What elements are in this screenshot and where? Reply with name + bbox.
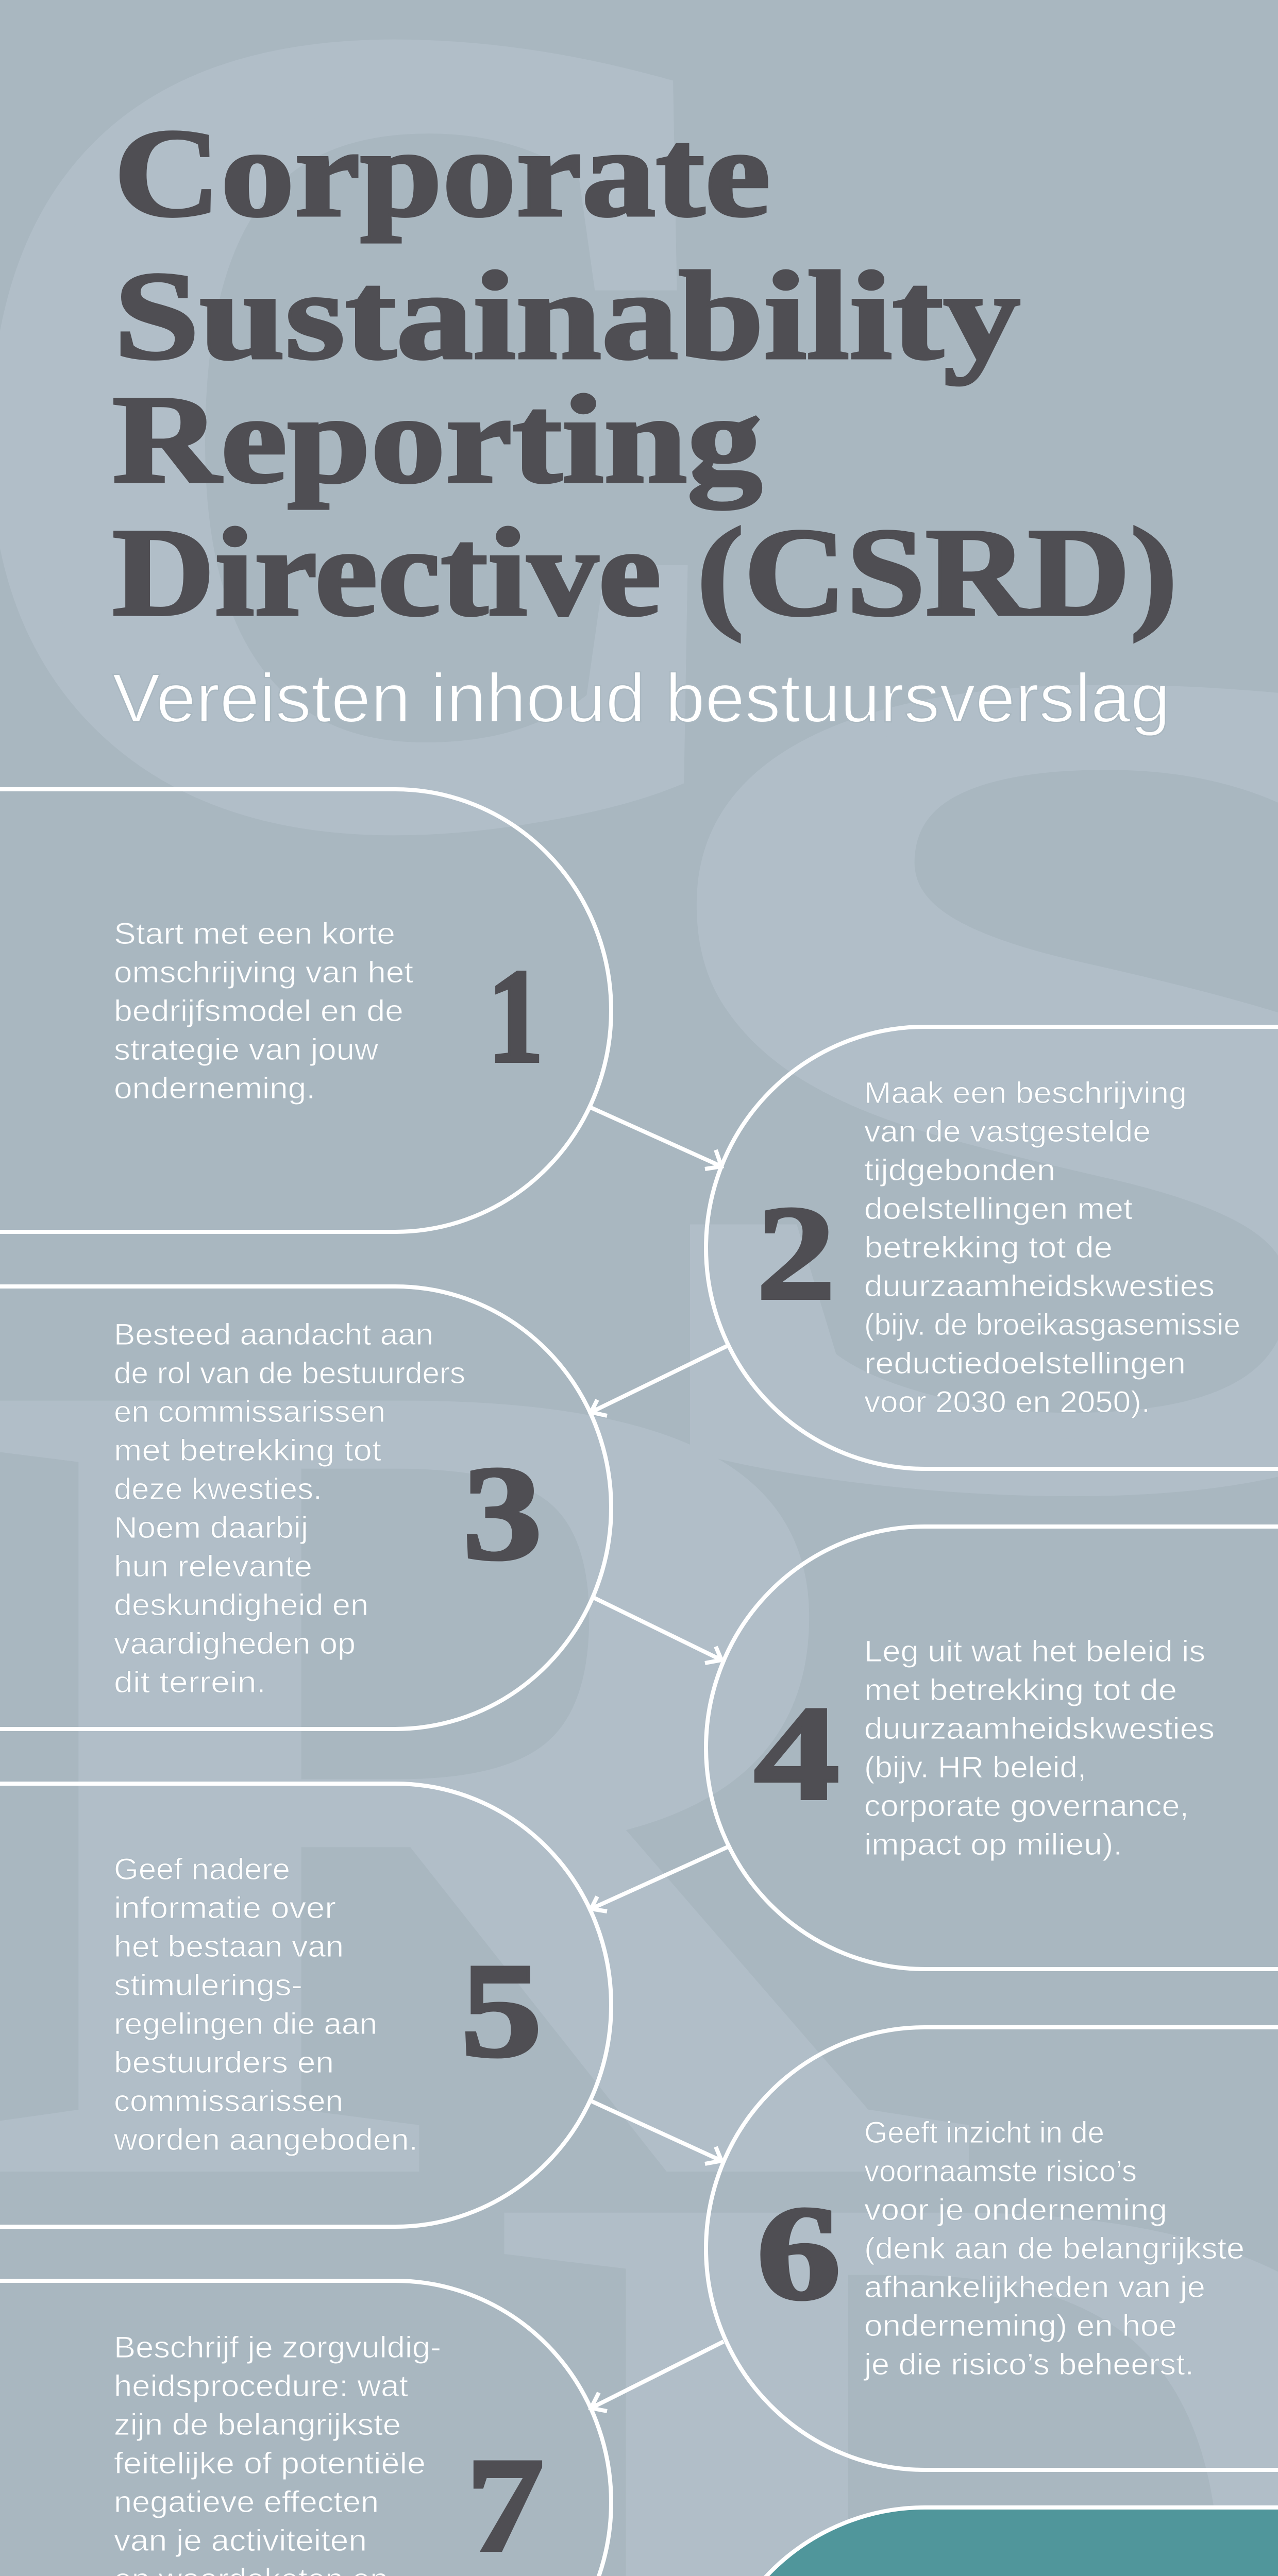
panel: step 2 bbox=[706, 1027, 1278, 1469]
panel: step 7 bbox=[0, 2281, 611, 2576]
text: step 3: met betrekking tot bbox=[114, 1434, 381, 1467]
arrow: step 4 to 5 bbox=[591, 1847, 728, 1911]
text: step 2: doelstellingen met bbox=[864, 1192, 1133, 1226]
text: step 7: feitelijke of potentiële bbox=[114, 2447, 426, 2480]
panel: step 4 bbox=[706, 1527, 1278, 1969]
text: step 4: impact op milieu). bbox=[864, 1828, 1122, 1861]
text: step 3: vaardigheden op bbox=[114, 1627, 356, 1660]
text: step 7: van je activiteiten bbox=[114, 2524, 367, 2557]
text: step 3: Besteed aandacht aan bbox=[114, 1318, 433, 1351]
panel: step 5 bbox=[0, 1784, 611, 2227]
text: step 2: duurzaamheidskwesties bbox=[864, 1269, 1215, 1303]
text: step 6: Geeft inzicht in de bbox=[864, 2116, 1104, 2149]
number 3: 3 bbox=[463, 1438, 542, 1588]
title: Directive (CSRD) bbox=[112, 502, 1178, 642]
text: step 7: zijn de belangrijkste bbox=[114, 2408, 401, 2442]
text: step 1: onderneming. bbox=[114, 1072, 315, 1105]
text: step 3: dit terrein. bbox=[114, 1666, 266, 1699]
number 7: 7 bbox=[466, 2430, 544, 2576]
number 1: 1 bbox=[487, 941, 544, 1091]
number 2: 2 bbox=[756, 1178, 835, 1328]
text: step 4: (bijv. HR beleid, bbox=[864, 1751, 1086, 1784]
text: step 5: informatie over bbox=[114, 1891, 336, 1925]
text: step 3: hun relevante bbox=[114, 1550, 312, 1583]
panel: tip bbox=[706, 2507, 1278, 2576]
text: step 3: de rol van de bestuurders bbox=[114, 1357, 465, 1390]
text: step 4: met betrekking tot de bbox=[864, 1673, 1177, 1707]
text: step 2: reductiedoelstellingen bbox=[864, 1347, 1186, 1380]
number 6: 6 bbox=[756, 2178, 841, 2328]
text: step 7: Beschrijf je zorgvuldig- bbox=[114, 2331, 441, 2364]
panel: step 3 bbox=[0, 1286, 611, 1729]
text: step 7: heidsprocedure: wat bbox=[114, 2369, 408, 2403]
text: step 5: Geef nadere bbox=[114, 1853, 290, 1886]
text: step 2: Maak een beschrijving bbox=[864, 1076, 1187, 1110]
title: Reporting bbox=[112, 369, 762, 510]
text: step 6: voornaamste risico’s bbox=[864, 2155, 1137, 2188]
text: step 3: deze kwesties. bbox=[114, 1472, 322, 1506]
text: step 6: voor je onderneming bbox=[864, 2193, 1167, 2227]
arrow: step 1 to 2 bbox=[591, 1108, 721, 1169]
text: step 6: afhankelijkheden van je bbox=[864, 2270, 1205, 2304]
text: step 4 bbox=[864, 1635, 1215, 1861]
text: step 5: worden aangeboden. bbox=[113, 2123, 418, 2157]
number 4: 4 bbox=[754, 1679, 839, 1828]
text: step 5: stimulerings- bbox=[114, 1969, 302, 2002]
text: step 7 bbox=[113, 2331, 441, 2576]
text: step 5: het bestaan van bbox=[114, 1930, 344, 1963]
text: step 6 bbox=[863, 2116, 1245, 2381]
panel: step 6 bbox=[706, 2027, 1278, 2470]
text: step 5: regelingen die aan bbox=[114, 2007, 377, 2041]
title bbox=[112, 103, 1178, 642]
text: step 6: je die risico’s beheerst. bbox=[863, 2348, 1194, 2381]
text: step 1: bedrijfsmodel en de bbox=[114, 994, 403, 1028]
text: step 5 bbox=[113, 1853, 418, 2157]
text: step 2: betrekking tot de bbox=[864, 1231, 1113, 1264]
text: step 3: en commissarissen bbox=[114, 1395, 385, 1429]
text: step 6: (denk aan de belangrijkste bbox=[864, 2232, 1245, 2265]
text: step 5: commissarissen bbox=[114, 2084, 343, 2118]
text: step 3: deskundigheid en bbox=[114, 1588, 368, 1622]
arrow: step 3 to 4 bbox=[593, 1597, 721, 1663]
text: step 1: strategie van jouw bbox=[114, 1033, 379, 1066]
text: step 1: omschrijving van het bbox=[114, 956, 413, 989]
text: step 1 bbox=[114, 917, 413, 1105]
arrow: step 5 to 6 bbox=[591, 2101, 721, 2164]
text: step 4: Leg uit wat het beleid is bbox=[864, 1635, 1205, 1668]
text: step 1: Start met een korte bbox=[114, 917, 395, 951]
text: step 6: onderneming) en hoe bbox=[864, 2309, 1177, 2343]
subtitle: Vereisten inhoud bestuursverslag bbox=[112, 660, 1170, 737]
text: step 3 bbox=[114, 1318, 465, 1699]
text: step 4: duurzaamheidskwesties bbox=[864, 1712, 1215, 1745]
text: step 2: tijdgebonden bbox=[864, 1154, 1055, 1187]
text: step 2: (bijv. de broeikasgasemissie bbox=[864, 1308, 1240, 1342]
panel: step 1 bbox=[0, 789, 611, 1232]
text: step 2 bbox=[864, 1076, 1240, 1419]
text: step 5: bestuurders en bbox=[114, 2046, 334, 2079]
number 5: 5 bbox=[461, 1936, 542, 2085]
text: step 3: Noem daarbij bbox=[114, 1511, 308, 1545]
text: step 7: negatieve effecten bbox=[114, 2485, 379, 2519]
arrow: step 2 to 3 bbox=[591, 1346, 728, 1416]
title: Sustainability bbox=[114, 246, 1020, 385]
text: step 2: voor 2030 en 2050). bbox=[864, 1385, 1150, 1419]
text: step 4: corporate governance, bbox=[864, 1789, 1189, 1823]
title: Corporate bbox=[114, 103, 770, 243]
arrow: step 6 to 7 bbox=[591, 2342, 724, 2411]
text: step 2: van de vastgestelde bbox=[864, 1115, 1151, 1148]
